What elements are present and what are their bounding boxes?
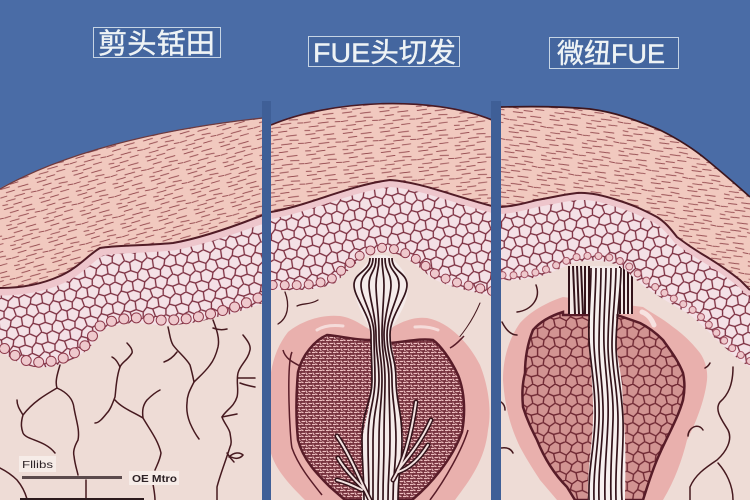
central strands (589, 268, 623, 500)
divider left (262, 101, 271, 500)
hair bundle (568, 266, 633, 500)
legend: scale lines and labels: Fllibs (22, 460, 53, 471)
label chip right (129, 471, 179, 485)
cell layer bottom beads (0, 298, 258, 362)
cell layer (271, 180, 492, 296)
top hair block (568, 266, 633, 314)
legend: scale lines and labels: OE Mtro (132, 474, 177, 485)
title: middle: FUE头切发 (313, 38, 456, 68)
cell layer (0, 216, 262, 368)
label chip left (19, 456, 56, 472)
title: right: 微纽FUE (557, 39, 665, 69)
nerve lines (501, 285, 733, 500)
panel: left skin cross-section (0, 118, 268, 500)
lower tissue (271, 240, 492, 500)
sheath contour lines (283, 336, 468, 500)
divider right (491, 101, 501, 500)
dermis boundary (271, 184, 492, 216)
panel: middle FUE follicle (266, 104, 498, 500)
top hair stripes (569, 266, 632, 314)
cell layer bottom beads (271, 248, 492, 291)
hair strands (354, 258, 407, 500)
scale bar (22, 476, 122, 479)
cell layer bottom beads (501, 256, 750, 361)
title: left: 剪头铦田 (98, 28, 215, 59)
dermis boundary (0, 220, 263, 292)
follicle highlights (317, 325, 438, 330)
dermis (496, 107, 750, 296)
panel: right micro FUE follicle (496, 107, 750, 500)
dermis boundary (501, 197, 750, 294)
follicle outer sheath (503, 297, 707, 500)
lower tissue (501, 260, 750, 500)
branching roots (337, 402, 431, 500)
dermis (266, 104, 498, 213)
legend: scale lines and labels (19, 456, 179, 500)
follicle inner bulb (296, 335, 464, 500)
cell layer (501, 186, 750, 367)
baseline (20, 498, 144, 500)
hair bundle (337, 255, 431, 500)
lower tissue (0, 300, 263, 500)
central strand silhouette (588, 268, 625, 500)
stray nerve marks (277, 291, 480, 338)
nerve lines (0, 320, 255, 500)
follicle inner bulb (522, 312, 684, 500)
bundle silhouette (354, 255, 408, 500)
follicle outer sheath (270, 316, 490, 500)
follicle highlight (642, 312, 654, 325)
dermis (0, 118, 268, 288)
